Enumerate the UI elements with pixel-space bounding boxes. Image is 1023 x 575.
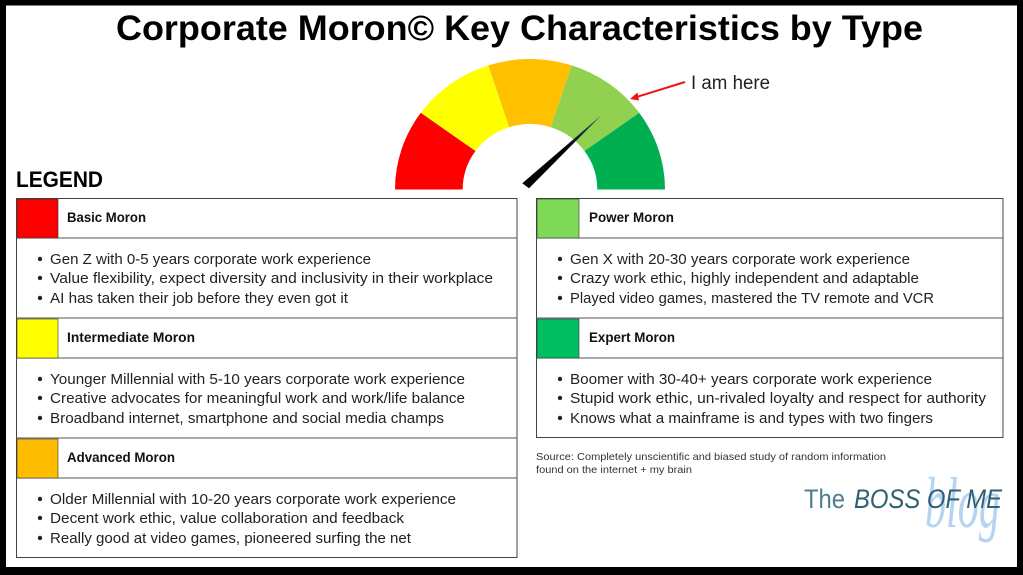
heading: Expert Moron: Expert Moron bbox=[589, 330, 675, 345]
logo: The Boss of Me blog: BOSS OF ME bbox=[854, 484, 1003, 514]
swatch: basic bbox=[17, 199, 58, 238]
swatch: advanced bbox=[17, 439, 58, 478]
swatch: intermediate bbox=[17, 319, 58, 358]
source note: found on the internet + my brain bbox=[536, 464, 692, 476]
bullets: Basic Moron: Gen Z with 0-5 years corporate work experience bbox=[50, 251, 371, 268]
legend heading: LEGEND bbox=[16, 167, 103, 192]
bullets: Advanced Moron: Older Millennial with 10-20 years corporate work experience bbox=[50, 491, 456, 508]
bullets: Basic Moron bbox=[38, 251, 493, 307]
source note bbox=[536, 451, 886, 476]
gauge chart bbox=[395, 59, 665, 190]
heading: Advanced Moron: Advanced Moron bbox=[67, 450, 175, 465]
bullets: Power Moron: Crazy work ethic, highly independent and adaptable bbox=[570, 270, 919, 287]
bullets: Intermediate Moron: Broadband internet, smartphone and social media champs bbox=[50, 410, 444, 427]
bullets: Power Moron: Gen X with 20-30 years corporate work experience bbox=[570, 251, 910, 268]
bullets: Power Moron bbox=[558, 251, 934, 307]
bullets: Advanced Moron: Really good at video games, pioneered surfing the net bbox=[50, 530, 412, 547]
heading: Power Moron: Power Moron bbox=[589, 210, 674, 225]
logo: The Boss of Me blog: The bbox=[804, 484, 845, 514]
heading: Basic Moron: Basic Moron bbox=[67, 210, 146, 225]
swatch: expert bbox=[537, 319, 579, 358]
panel: left legend table bbox=[16, 198, 517, 558]
bullets: Expert Moron: Knows what a mainframe is and types with two fingers bbox=[570, 410, 933, 427]
bullets: Intermediate Moron bbox=[38, 371, 465, 427]
source note: Source: Completely unscientific and biased study of random information bbox=[536, 451, 886, 463]
arrow: pointer to gauge bbox=[630, 82, 685, 100]
swatch: power bbox=[537, 199, 579, 238]
panel: right legend table bbox=[536, 198, 1003, 438]
heading: Intermediate Moron: Intermediate Moron bbox=[67, 330, 195, 345]
bullets: Intermediate Moron: Younger Millennial with 5-10 years corporate work experience bbox=[50, 371, 465, 388]
title: Corporate Moron© Key Characteristics by Type bbox=[116, 9, 923, 48]
bullets: Power Moron: Played video games, mastered the TV remote and VCR bbox=[570, 290, 934, 307]
gauge needle bbox=[522, 115, 602, 188]
logo: The Boss of Me blog bbox=[804, 463, 1003, 543]
bullets: Basic Moron: AI has taken their job before they even got it bbox=[50, 290, 349, 307]
bullets: Expert Moron: Stupid work ethic, un-rivaled loyalty and respect for authority bbox=[570, 390, 987, 407]
bullets: Expert Moron bbox=[558, 371, 987, 427]
callout: I am here: I am here bbox=[691, 73, 770, 94]
bullets: Expert Moron: Boomer with 30-40+ years corporate work experience bbox=[570, 371, 932, 388]
bullets: Basic Moron: Value flexibility, expect diversity and inclusivity in their workplace bbox=[50, 270, 493, 287]
bullets: Intermediate Moron: Creative advocates for meaningful work and work/life balance bbox=[50, 390, 465, 407]
bullets: Advanced Moron: Decent work ethic, value collaboration and feedback bbox=[50, 510, 405, 527]
bullets: Advanced Moron bbox=[38, 491, 456, 547]
